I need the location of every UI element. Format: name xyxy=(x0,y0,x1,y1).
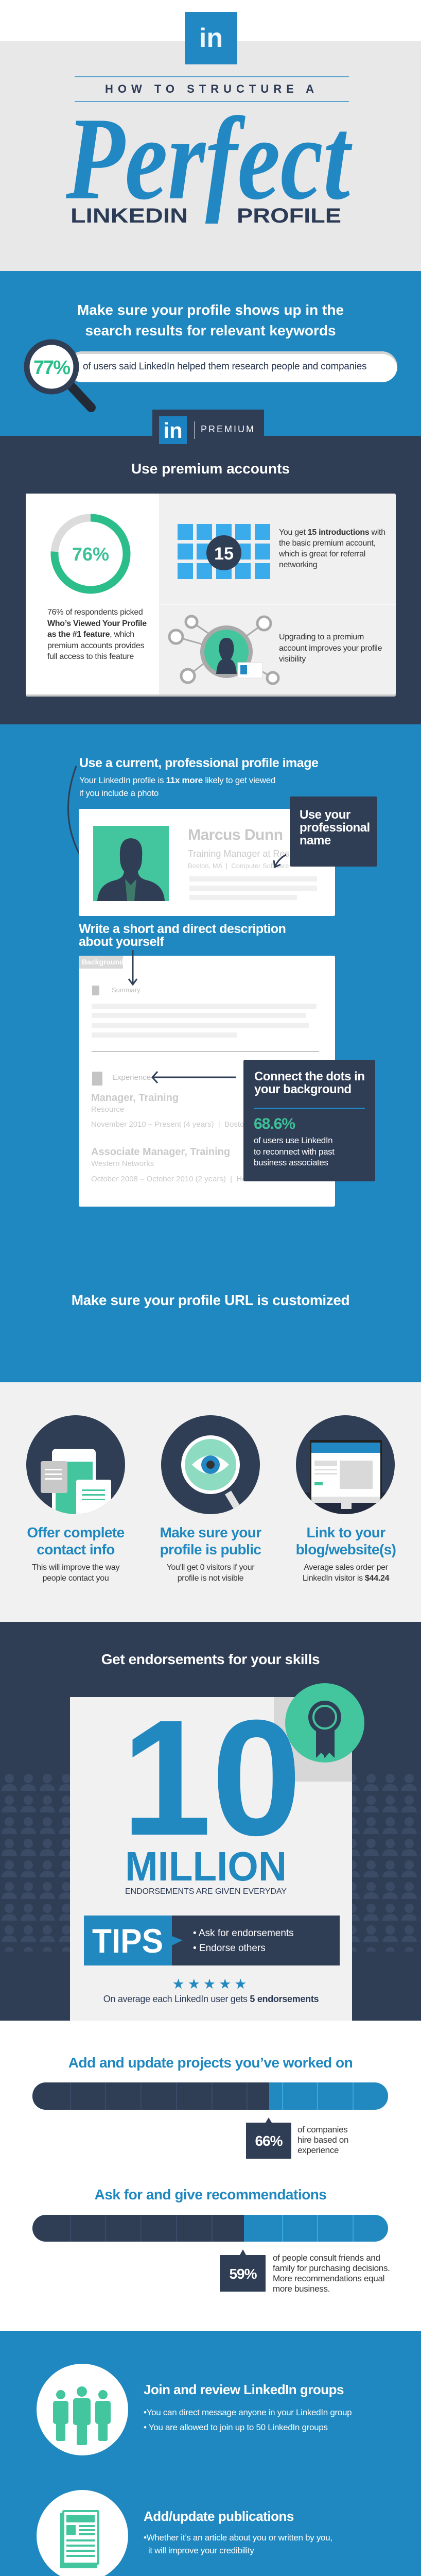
callout: connect the dots xyxy=(243,1060,375,1181)
icon: magnifier with 77% xyxy=(24,339,96,412)
background card: Summary xyxy=(112,986,141,994)
item: publications: Add/update publications xyxy=(144,2509,294,2524)
icon: monitor xyxy=(296,1415,395,1514)
background card xyxy=(79,956,335,1207)
tip: public profile: Make sure your profile is public xyxy=(160,1524,261,1557)
heading: recommendations: Ask for and give recommendations xyxy=(95,2187,326,2202)
tip: contact info: people contact you xyxy=(43,1574,109,1583)
section: search results xyxy=(0,271,421,436)
icon: network xyxy=(168,615,280,685)
arrow: down to summary xyxy=(128,950,138,986)
item: publications: •Whether it’s an article about you or written by you, xyxy=(144,2533,332,2543)
photo xyxy=(93,826,169,901)
card xyxy=(26,494,396,694)
paper card xyxy=(70,1697,352,2021)
MILLION: ENDORSEMENTS ARE GIVEN EVERYDAY xyxy=(125,1887,287,1896)
logo: linkedin premium: PREMIUM xyxy=(201,424,255,434)
icon: award badge xyxy=(285,1683,364,1762)
section: endorsements xyxy=(0,1622,421,2021)
logo: linkedin premium xyxy=(159,416,255,444)
callout: professional name xyxy=(290,796,377,867)
tip: public profile: You'll get 0 visitors if your xyxy=(167,1563,254,1572)
icon: grid of 15: 15 xyxy=(214,544,234,564)
section: projects: hire based on xyxy=(297,2135,348,2145)
section: premium xyxy=(0,436,421,724)
tip: blog xyxy=(296,1524,396,1583)
section: profile image and description: Your LinkedIn profile is 11x more likely to get viewed xyxy=(79,775,275,785)
tip: public profile: profile is not visible xyxy=(178,1574,243,1583)
icon: people xyxy=(37,2364,128,2455)
arrow: left to experience xyxy=(151,1071,236,1083)
summary block xyxy=(92,986,99,995)
item: publications: it will improve your credibility xyxy=(148,2546,254,2555)
icon: newspaper xyxy=(37,2490,128,2576)
background card: October 2008 – October 2010 (2 years) | Hou xyxy=(91,1175,251,1183)
section: projects: More recommendations equal xyxy=(273,2274,384,2283)
profile card: Training Manager at Reso xyxy=(188,849,294,859)
callout: connect the dots: 68.6% xyxy=(254,1115,295,1132)
section: projects: of companies xyxy=(297,2125,348,2134)
profile card: Boston, MA | Computer Software xyxy=(188,862,289,870)
premium tab xyxy=(152,410,264,440)
background card: Background xyxy=(82,958,124,966)
header background xyxy=(0,41,421,271)
tips box: • Endorse others xyxy=(193,1943,266,1954)
item: groups: •You can direct message anyone in your LinkedIn group xyxy=(144,2408,352,2417)
section: projects: experience xyxy=(297,2145,339,2155)
section: projects: more business. xyxy=(273,2284,330,2294)
callout 59%: 59% xyxy=(229,2266,257,2282)
paper card: On average each LinkedIn user gets 5 endorsements xyxy=(103,1994,319,2004)
tip: blog: LinkedIn visitor is $44.24 xyxy=(303,1574,389,1583)
title: Perfect LinkedIn Profile: PROFILE xyxy=(237,205,341,227)
section: activity tips xyxy=(0,2331,421,2576)
donut chart 76%: 76% xyxy=(72,544,109,565)
background card: Resource xyxy=(91,1105,124,1114)
stars: ★★★★★ xyxy=(172,1976,250,1992)
heading xyxy=(77,302,344,338)
icon: magnifier with 77%: 77% xyxy=(33,357,70,379)
icon: linkedin logo xyxy=(185,12,237,64)
callout 66%: 66% xyxy=(255,2133,283,2149)
section: search results: of users said LinkedIn helped them research people and companies xyxy=(83,361,366,372)
bar chart 66% xyxy=(32,2082,388,2110)
callout: professional name: Use your professional name xyxy=(300,808,370,848)
heading: search results for relevant keywords xyxy=(85,323,336,338)
folded corner xyxy=(274,1697,352,1782)
tips box: TIPS xyxy=(92,1922,163,1960)
callout: connect the dots: to reconnect with past xyxy=(254,1147,335,1156)
callout: connect the dots: business associates xyxy=(254,1158,328,1167)
section: projects xyxy=(32,2057,389,2292)
background pattern: people xyxy=(2,1774,421,1952)
heading: profile image: Use a current, professional profile image xyxy=(79,756,318,770)
background card: November 2010 – Present (4 years) | Boston, xyxy=(91,1120,251,1129)
icon: linkedin logo: in xyxy=(199,23,223,53)
heading: projects: Add and update projects you’ve worked on xyxy=(68,2055,353,2071)
tips box: • Ask for endorsements xyxy=(193,1928,294,1939)
background card: Associate Manager, Training xyxy=(91,1146,230,1158)
callout 59% xyxy=(220,2249,266,2292)
tip: contact info: Offer complete contact info xyxy=(27,1524,125,1557)
heading: Get endorsements for your skills xyxy=(101,1651,320,1667)
arrow: small to name xyxy=(273,854,287,869)
section: three tips xyxy=(0,1382,421,1622)
tip: blog: Average sales order per xyxy=(304,1563,388,1572)
callout: connect the dots: Connect the dots in your background xyxy=(254,1070,364,1096)
heading: description: about yourself xyxy=(79,935,164,949)
profile card: Marcus Dunn xyxy=(188,826,283,843)
item: groups xyxy=(37,2364,352,2455)
bar chart 59% xyxy=(32,2215,388,2242)
logo: linkedin premium: in xyxy=(163,418,183,443)
heading: description: Write a short and direct description xyxy=(79,922,286,936)
heading: Use premium accounts xyxy=(131,461,290,477)
arrow: curved to photo xyxy=(67,766,79,854)
background card: Experience xyxy=(112,1073,151,1082)
callout 66% xyxy=(246,2117,291,2159)
search bar xyxy=(67,351,397,382)
callout: connect the dots: of users use LinkedIn xyxy=(254,1136,332,1145)
section: profile image and description xyxy=(0,724,421,1382)
section: profile image and description: if you include a photo xyxy=(79,788,159,798)
icon: eye xyxy=(161,1415,260,1514)
tip: public profile xyxy=(160,1524,261,1583)
section: projects: family for purchasing decisions. xyxy=(273,2263,390,2273)
item: groups: Join and review LinkedIn groups xyxy=(144,2382,344,2397)
tip: blog: Link to your blog/website(s) xyxy=(296,1524,396,1557)
background card: Manager, Training xyxy=(91,1092,179,1104)
section: projects: of people consult friends and xyxy=(273,2253,380,2263)
background card: Western Networks xyxy=(91,1159,154,1168)
item: publications xyxy=(37,2490,332,2576)
item: groups: • You are allowed to join up to 50 LinkedIn groups xyxy=(144,2422,328,2432)
icon: grid of 15 xyxy=(178,524,270,579)
donut chart 76% xyxy=(50,514,131,594)
tip: contact info: This will improve the way xyxy=(32,1563,119,1572)
text: visibility: Upgrading to a premium account improves your profile visibility xyxy=(279,633,382,664)
heading: Make sure your profile shows up in the xyxy=(77,302,344,318)
text: introductions: You get 15 introductions with the basic premium account, which is great for referral networking xyxy=(279,528,385,569)
experience block xyxy=(92,1072,102,1086)
title line 1: HOW TO STRUCTURE A xyxy=(105,82,319,95)
heading: url: Make sure your profile URL is customized xyxy=(72,1292,349,1308)
icon: contact xyxy=(26,1415,125,1514)
tip: contact info xyxy=(27,1524,125,1583)
tips box xyxy=(84,1916,340,1965)
title: Perfect LinkedIn Profile: LINKEDIN xyxy=(71,205,188,227)
heading: description xyxy=(79,922,286,949)
text: who's viewed: 76% of respondents picked Who’s Viewed Your Profile as the #1 feature, which premium accounts provides full access to this feature xyxy=(47,608,147,661)
profile card xyxy=(79,809,335,916)
